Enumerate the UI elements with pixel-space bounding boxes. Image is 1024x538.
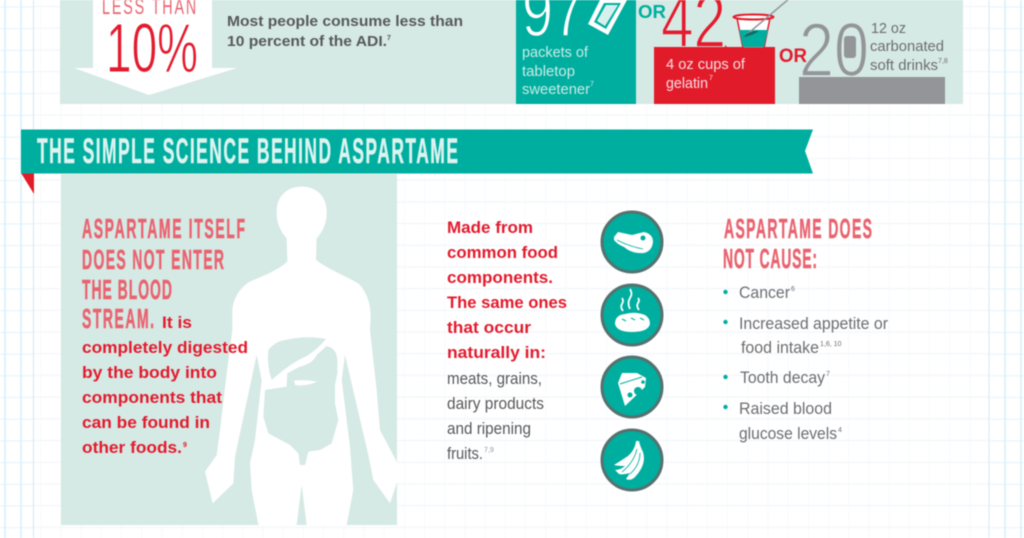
text: aspartame itself does not enter the blood stream: other foods.	[82, 438, 182, 457]
illustration: stomach and intestines	[263, 346, 338, 465]
text: aspartame does not cause list: NOT CAUSE:	[723, 243, 817, 274]
panel: 20 carbonated soft drinks: 20	[799, 8, 869, 93]
text: aspartame itself does not enter the blood stream: DOES NOT ENTER	[82, 244, 224, 275]
text: made from common food components: meats, grains,	[447, 369, 542, 388]
illustration: human body silhouette	[205, 187, 400, 525]
text: consumption note: 10 percent of the ADI.	[227, 33, 387, 50]
panel: 42 cups of gelatin: 7	[709, 75, 713, 82]
panel: 20 carbonated soft drinks: 7,8	[938, 58, 948, 65]
text: aspartame itself does not enter the blood stream: It is	[162, 313, 192, 332]
text: aspartame itself does not enter the blood stream: completely digested	[82, 338, 248, 357]
text: made from common food components: dairy products	[447, 394, 544, 413]
panel: 20 carbonated soft drinks: carbonated	[870, 38, 944, 55]
text: made from common food components: Made from	[447, 218, 533, 237]
icon: gelatin cup with spoon	[734, 0, 790, 48]
text: aspartame itself does not enter the blood stream: by the body into	[82, 363, 217, 382]
text: made from common food components: common food	[447, 243, 558, 262]
text: aspartame does not cause list: 1,6, 10	[820, 341, 842, 348]
panel: 42 cups of gelatin: 4 oz cups of	[666, 56, 746, 73]
text: aspartame itself does not enter the blood stream	[82, 213, 248, 457]
panel: 42 cups of gelatin: gelatin	[666, 75, 708, 92]
panel: 97 packets of sweetener	[516, 0, 636, 104]
text: aspartame does not cause list: glucose levels	[739, 424, 837, 443]
icon: down arrow with less than 10 percent	[74, 0, 237, 95]
text: aspartame itself does not enter the blood stream: 9	[183, 442, 187, 449]
text: made from common food components: components.	[447, 268, 553, 287]
panel: 97 packets of sweetener: sweetener	[522, 81, 590, 98]
text: aspartame does not cause list: food intake	[741, 338, 819, 357]
text: aspartame does not cause list: Tooth decay	[740, 368, 825, 387]
text: consumption note: Most people consume less than	[227, 13, 463, 30]
icon: sweetener packet	[588, 0, 627, 35]
text: made from common food components: that occur	[447, 318, 531, 337]
text: aspartame does not cause list: Raised blood	[739, 399, 832, 418]
icon: meat	[602, 212, 662, 272]
text: aspartame does not cause list: ASPARTAME DOES	[724, 213, 872, 244]
icon: down arrow with less than 10 percent: 10%	[106, 9, 198, 87]
text: aspartame does not cause list	[723, 213, 888, 443]
icon: soda can	[844, 36, 856, 58]
text: made from common food components: fruits.	[447, 444, 483, 463]
icon: bread	[602, 285, 662, 345]
text: consumption note	[227, 13, 463, 50]
text: aspartame itself does not enter the blood stream: ASPARTAME ITSELF	[82, 213, 245, 244]
text: made from common food components: and ripening	[447, 419, 531, 438]
label: OR teal: OR	[638, 2, 666, 22]
panel: 20 carbonated soft drinks: 12 oz	[871, 20, 906, 37]
icon: bananas	[602, 430, 662, 490]
panel: 20 carbonated soft drinks	[799, 8, 948, 104]
text: aspartame itself does not enter the blood stream: components that	[82, 388, 222, 407]
panel: 20 carbonated soft drinks: soft drinks	[870, 57, 938, 74]
panel: 97 packets of sweetener: packets of	[522, 44, 589, 61]
panel: 97 packets of sweetener: 7	[590, 81, 594, 88]
panel: 97 packets of sweetener: tabletop	[522, 63, 575, 80]
illustration: liver	[268, 337, 326, 380]
text: aspartame does not cause list: 6	[791, 286, 795, 293]
heading ribbon: the simple science behind aspartame	[21, 130, 813, 194]
text: made from common food components: The same ones	[447, 293, 567, 312]
illustration: stomach highlight	[294, 380, 317, 385]
text: aspartame does not cause list: Cancer	[739, 283, 790, 302]
panel: top intake summary	[60, 0, 963, 104]
text: aspartame itself does not enter the blood stream: THE BLOOD	[82, 274, 172, 305]
text: made from common food components	[447, 218, 567, 463]
text: consumption note: 7	[387, 35, 391, 42]
text: aspartame itself does not enter the blood stream: STREAM.	[82, 303, 154, 334]
text: made from common food components: 7,9	[484, 447, 494, 454]
text: aspartame itself does not enter the blood stream: can be found in	[82, 413, 210, 432]
icon: cheese	[602, 357, 662, 417]
text: aspartame does not cause list: 7	[826, 371, 830, 378]
panel: digestion	[61, 174, 400, 525]
heading ribbon: the simple science behind aspartame: THE SIMPLE SCIENCE BEHIND ASPARTAME	[37, 131, 458, 171]
label: OR red: OR	[779, 46, 807, 67]
text: made from common food components: naturally in:	[447, 343, 546, 362]
text: aspartame does not cause list: Increased appetite or	[739, 314, 888, 333]
panel: 42 cups of gelatin	[654, 0, 790, 104]
text: aspartame does not cause list: 4	[838, 427, 842, 434]
